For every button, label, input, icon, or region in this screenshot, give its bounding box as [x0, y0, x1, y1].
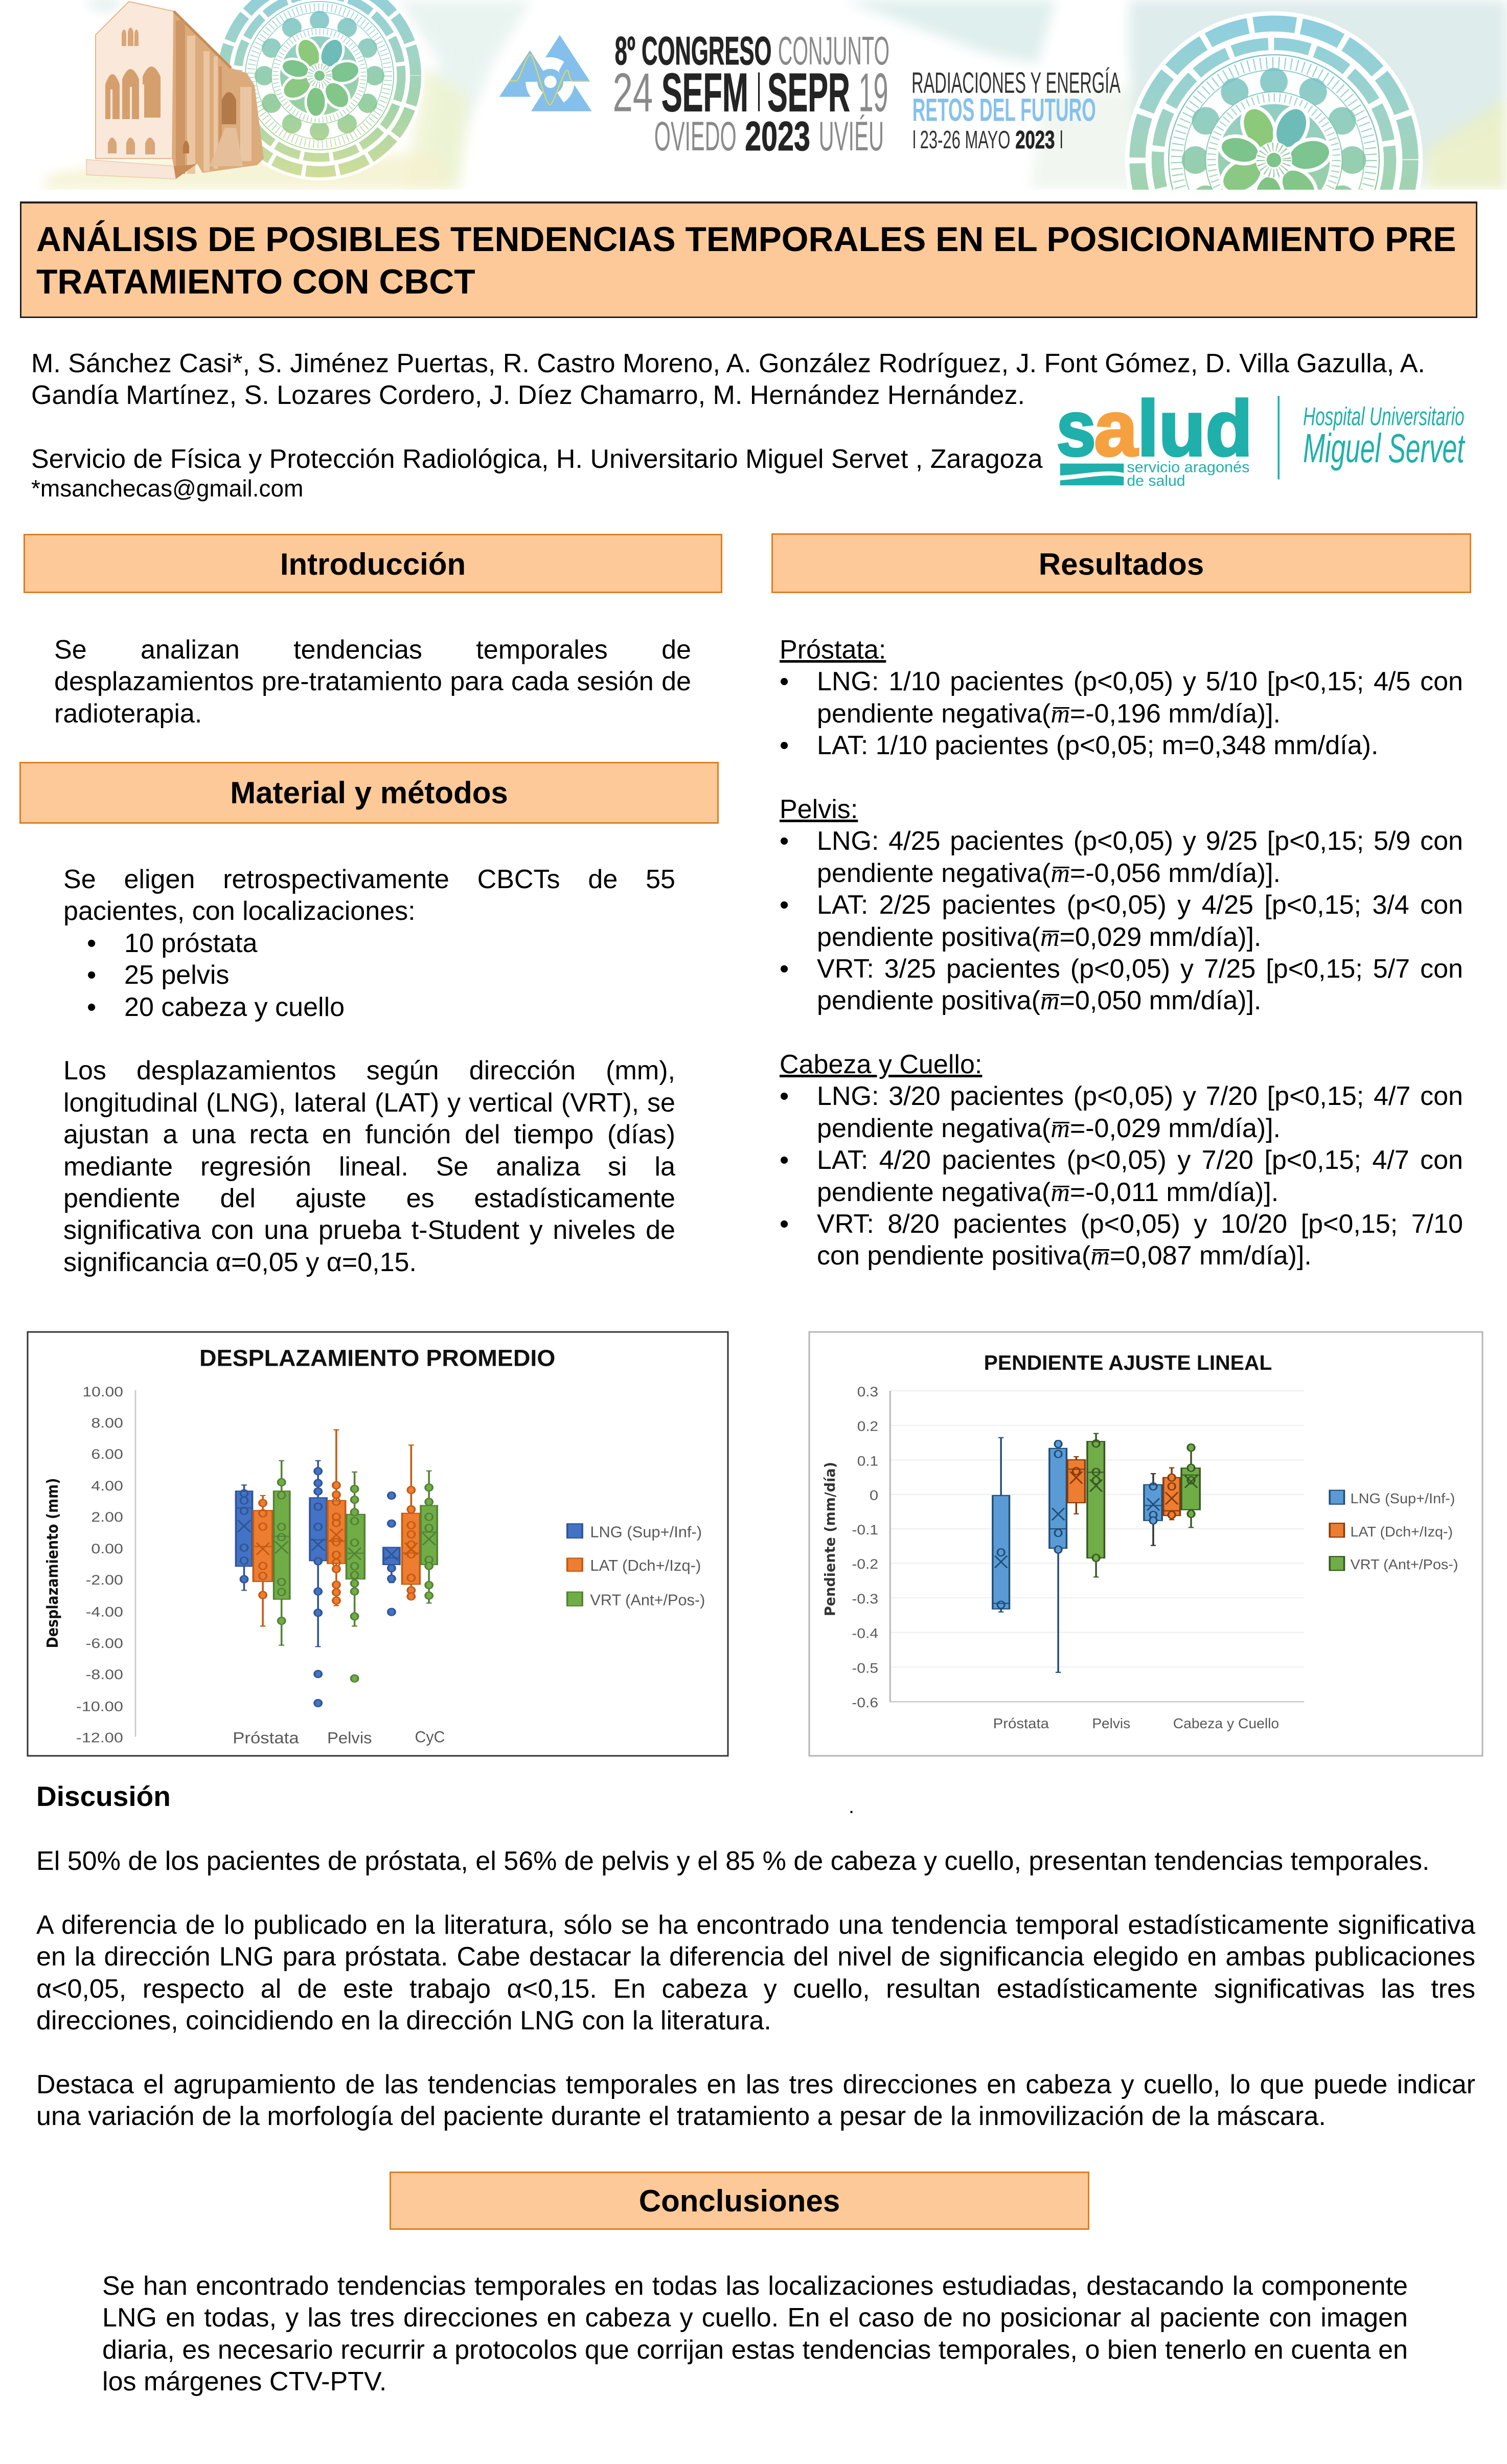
text: resultados: VRT: 8/20 pacientes (p<0,05) y 10/20 [p<0,15; 7/10 [817, 1209, 1463, 1239]
y axis ticks: 10.00 [82, 1384, 123, 1399]
text: resultados: LAT: 1/10 pacientes (p<0,05; m=0,348 mm/día). [817, 731, 1378, 760]
text: material y métodos: pendiente del ajuste es estadísticamente [63, 1184, 675, 1213]
y axis ticks: 0.3 [857, 1384, 878, 1399]
y axis ticks: -2.00 [86, 1572, 123, 1588]
title [20, 201, 1477, 318]
box: próstata LNG [993, 1438, 1010, 1612]
title: ANÁLISIS DE POSIBLES TENDENCIAS TEMPORALES EN EL POSICIONAMIENTO PRE [36, 220, 1456, 259]
text: introducción: Se analizan tendencias temporales de [54, 635, 691, 665]
legend [567, 1523, 705, 1609]
text: material y métodos: significativa con una prueba t-Student y niveles de [63, 1215, 675, 1245]
box: pelvis VRT [347, 1472, 364, 1682]
text: discusión: en la dirección LNG para próstata. Cabe destacar la diferencia del nivel de significancia elegido en ambas publicaciones [36, 1942, 1475, 1972]
text: resultados: Cabeza y Cuello: [780, 1050, 982, 1079]
y axis ticks: -0.1 [852, 1522, 878, 1538]
text: conclusiones: Se han encontrado tendencias temporales en todas las localizaciones estudiadas, destacando la componente [102, 2271, 1408, 2301]
text: resultados: LNG: 3/20 pacientes (p<0,05) y 7/20 [p<0,15; 4/7 con [817, 1081, 1463, 1111]
y axis ticks: -0.2 [852, 1556, 878, 1572]
text: material y métodos: Se eligen retrospectivamente CBCTs de 55 [63, 865, 675, 894]
y axis ticks: -0.3 [852, 1591, 878, 1607]
box: pelvis LNG [1049, 1440, 1066, 1672]
box: próstata LAT [253, 1496, 272, 1626]
text: material y métodos: 25 pelvis [124, 960, 229, 990]
affiliation: Servicio de Física y Protección Radiológica, H. Universitario Miguel Servet , Zaragoza [31, 444, 1043, 474]
chart: desplazamiento promedio [27, 1331, 729, 1757]
y axis ticks: -0.4 [852, 1625, 878, 1641]
y axis ticks: -12.00 [76, 1730, 123, 1745]
x axis labels: Próstata [233, 1729, 299, 1747]
heading: Conclusiones: Conclusiones [639, 2183, 840, 2218]
text: resultados: pendiente negativa(m=-0,029 mm/día)]. [817, 1114, 1281, 1143]
text: material y métodos [63, 865, 675, 1277]
congress title text: 24 [613, 62, 653, 123]
text: resultados: VRT: 3/25 pacientes (p<0,05) y 7/25 [p<0,15; 5/7 con [817, 954, 1463, 984]
x axis labels: Cabeza y Cuello [1173, 1715, 1279, 1731]
text: introducción: desplazamientos pre-tratamiento para cada sesión de [54, 667, 691, 696]
text: resultados: pendiente positiva(m=0,050 mm/día)]. [817, 986, 1261, 1015]
text: resultados: pendiente negativa(m=-0,196 mm/día)]. [817, 699, 1281, 729]
text: resultados: Pelvis: [780, 795, 858, 824]
congress title text: UVIÉU [819, 113, 884, 159]
header banner [41, 0, 1507, 190]
text: discusión: una variación de la morfología del paciente durante el tratamiento a pesar de la inmovilización de la máscara. [36, 2101, 1326, 2131]
logos: salud and hospital: a [1094, 385, 1138, 472]
text: discusión [36, 1846, 1475, 2131]
heading: Material y métodos [19, 762, 719, 824]
heading: Introducción: Introducción [280, 547, 466, 581]
text: discusión: Destaca el agrupamiento de las tendencias temporales en las tres direcciones en cabeza y cuello, lo que puede indicar [36, 2070, 1475, 2099]
x axis labels [233, 1728, 445, 1747]
text: resultados: Próstata: [780, 635, 886, 665]
y axis ticks: 0.2 [857, 1418, 878, 1434]
congress title text: 2023 [1015, 126, 1055, 154]
congress title text: 23-26 MAYO [920, 126, 1010, 154]
text: discusión: El 50% de los pacientes de próstata, el 56% de pelvis y el 85 % de cabeza y cuello, presentan tendencias temporales. [36, 1846, 1429, 1876]
text: resultados: pendiente negativa(m=-0,056 mm/día)]. [817, 858, 1281, 888]
text: conclusiones [102, 2271, 1408, 2397]
y axis ticks: -8.00 [86, 1667, 123, 1682]
icon: left rosette [215, 0, 424, 180]
text: discusión: direcciones, coincidiendo en la dirección LNG con la literatura. [36, 2006, 771, 2036]
y axis ticks: 4.00 [91, 1478, 123, 1494]
text: material y métodos: mediante regresión lineal. Se analiza si la [63, 1152, 675, 1182]
text: resultados: LNG: 4/25 pacientes (p<0,05) y 9/25 [p<0,15; 5/9 con [817, 826, 1463, 856]
chart: pendiente ajuste lineal [809, 1331, 1483, 1757]
box: pelvis LNG [310, 1461, 327, 1707]
congress title text: CONJUNTO [778, 29, 889, 73]
box: pelvis LAT [1067, 1457, 1085, 1514]
text: resultados: LNG: 1/10 pacientes (p<0,05) y 5/10 [p<0,15; 4/5 con [817, 667, 1463, 696]
y axis ticks: 0.1 [857, 1453, 878, 1468]
email: *msanchecas@gmail.com [31, 475, 303, 502]
y axis ticks: -10.00 [76, 1699, 123, 1714]
heading: Material y métodos: Material y métodos [230, 776, 508, 810]
text: resultados: LAT: 4/20 pacientes (p<0,05) y 7/20 [p<0,15; 4/7 con [817, 1145, 1463, 1175]
stray dot: . [849, 1795, 854, 1818]
text: introducción: radioterapia. [54, 699, 202, 729]
logos: salud and hospital [1057, 385, 1466, 489]
heading: Conclusiones [390, 2172, 1089, 2230]
y axis ticks: -6.00 [86, 1636, 123, 1651]
legend [1330, 1490, 1458, 1572]
heading: Resultados: Resultados [1039, 547, 1204, 581]
title: TRATAMIENTO CON CBCT [36, 263, 475, 301]
congress title text: 8º CONGRESO [615, 29, 771, 73]
x axis labels: Próstata [993, 1715, 1049, 1731]
y axis ticks: 6.00 [91, 1446, 123, 1462]
icon: right rosette [1125, 11, 1423, 190]
congress title text: 2023 [745, 113, 810, 159]
y axis ticks: -0.6 [852, 1694, 878, 1710]
y axis ticks: -4.00 [86, 1604, 123, 1619]
y axis ticks: -0.5 [852, 1660, 878, 1676]
x axis labels: Pelvis [1092, 1715, 1130, 1731]
text: resultados [780, 635, 1463, 1271]
heading: Discusión: Discusión [36, 1780, 171, 1812]
logos: salud and hospital: servicio aragonés [1127, 459, 1249, 476]
text: discusión: α<0,05, respecto al de este trabajo α<0,15. En cabeza y cuello, resultan estadísticamente significativas las tres [36, 1974, 1475, 2004]
congress title text: 19 [858, 62, 888, 123]
y axis ticks: 2.00 [91, 1509, 123, 1525]
text: material y métodos: ajustan a una recta en función del tiempo (días) [63, 1120, 675, 1149]
box: próstata VRT [274, 1461, 290, 1645]
y axis ticks: 0 [870, 1487, 878, 1503]
box: próstata LNG [236, 1485, 253, 1590]
x axis labels: Pelvis [327, 1729, 372, 1747]
text: resultados: pendiente positiva(m=0,029 mm/día)]. [817, 922, 1261, 952]
authors: Gandía Martínez, S. Lozares Cordero, J. Díez Chamarro, M. Hernández Hernández. [31, 380, 1025, 410]
y axis title: Desplazamiento (mm) [44, 1478, 62, 1648]
heading: Introducción [24, 534, 722, 593]
congress title text [613, 29, 1121, 159]
x axis labels: CyC [415, 1728, 445, 1746]
box: cabeza y cuello LAT [1163, 1468, 1180, 1520]
watercolour washes [41, 0, 1507, 190]
chart title: PENDIENTE AJUSTE LINEAL [984, 1351, 1272, 1374]
logo: congress triangles [499, 35, 592, 111]
text: introducción [54, 635, 691, 729]
text: material y métodos: longitudinal (LNG), lateral (LAT) y vertical (VRT), se [63, 1088, 675, 1118]
logos: salud and hospital: s [1057, 385, 1096, 472]
authors [31, 349, 1425, 410]
y axis ticks: 0.00 [91, 1541, 123, 1556]
text: material y métodos: 20 cabeza y cuello [124, 992, 345, 1022]
text: resultados: con pendiente positiva(m=0,087 mm/día)]. [817, 1241, 1312, 1271]
text: resultados: pendiente negativa(m=-0,011 mm/día)]. [817, 1178, 1278, 1207]
authors: M. Sánchez Casi*, S. Jiménez Puertas, R. Castro Moreno, A. González Rodríguez, J. Font Gómez, D. Villa Gazulla, A. [31, 349, 1425, 378]
congress title text: SEPR [767, 62, 850, 123]
text: conclusiones: LNG en todas, y las tres direcciones en cabeza y cuello. En el caso de no posicionar al paciente con imagen [102, 2303, 1408, 2333]
box: cabeza y cuello VRT [1181, 1444, 1200, 1527]
text: discusión: A diferencia de lo publicado en la literatura, sólo se ha encontrado una tendencia temporal estadísticamente significativa [36, 1910, 1475, 1940]
congress title text: OVIEDO [654, 113, 737, 159]
text: conclusiones: los márgenes CTV-PTV. [102, 2367, 386, 2397]
heading: Resultados [771, 533, 1471, 593]
y axis ticks: 8.00 [91, 1415, 123, 1431]
box: CyC LNG [383, 1492, 400, 1616]
logos: salud and hospital: lud [1137, 385, 1252, 472]
church arches [105, 66, 161, 119]
logos: salud and hospital: de salud [1127, 472, 1185, 489]
box: CyC VRT [421, 1471, 437, 1603]
box: pelvis LAT [328, 1430, 346, 1606]
text: material y métodos: Los desplazamientos según dirección (mm), [63, 1056, 675, 1086]
y axis ticks [852, 1384, 878, 1710]
text: material y métodos: pacientes, con localizaciones: [63, 896, 416, 926]
y axis ticks [76, 1384, 123, 1745]
box: cabeza y cuello LNG [1144, 1474, 1162, 1546]
x axis labels [993, 1715, 1279, 1731]
text: material y métodos: significancia α=0,05 y α=0,15. [63, 1248, 417, 1277]
y axis title: Pendiente (mm/día) [821, 1462, 838, 1616]
icon: church [86, 2, 264, 179]
text: resultados: LAT: 2/25 pacientes (p<0,05) y 4/25 [p<0,15; 3/4 con [817, 890, 1463, 920]
text: material y métodos: 10 próstata [124, 929, 257, 958]
congress title text: SEFM [661, 62, 748, 123]
box: pelvis VRT [1087, 1434, 1104, 1577]
box: CyC LAT [402, 1445, 420, 1600]
text: conclusiones: diaria, es necesario recurrir a protocolos que corrijan estas tendencias temporales, o bien tenerlo en cuenta en [102, 2335, 1408, 2365]
